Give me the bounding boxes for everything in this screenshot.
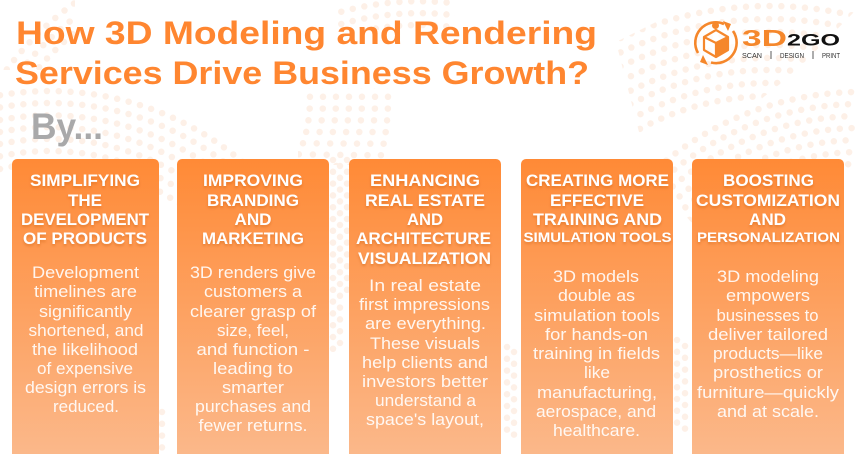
heading: ENHANCING bbox=[370, 171, 480, 190]
heading: SIMPLIFYING bbox=[30, 171, 140, 190]
body text: prosthetics or bbox=[713, 363, 823, 382]
heading: DEVELOPMENT bbox=[21, 210, 150, 229]
heading: THE bbox=[68, 191, 102, 210]
body text: significantly bbox=[39, 302, 133, 321]
body text: 3D models bbox=[553, 267, 639, 286]
logo tagline: SCAN bbox=[742, 53, 762, 60]
heading bbox=[356, 171, 491, 268]
logo tagline bbox=[742, 51, 841, 60]
heading: ARCHITECTURE bbox=[356, 229, 491, 248]
heading: CREATING MORE bbox=[526, 171, 669, 190]
body text: furniture—quickly bbox=[697, 383, 840, 402]
body text: empowers bbox=[726, 286, 810, 305]
body text: smarter bbox=[222, 378, 284, 397]
heading bbox=[696, 171, 840, 245]
heading bbox=[524, 171, 672, 245]
title: How 3D Modeling and Rendering bbox=[16, 15, 597, 51]
body text: like bbox=[584, 363, 610, 382]
heading: TRAINING AND bbox=[533, 210, 662, 229]
body text: reduced. bbox=[53, 397, 119, 416]
title: Services Drive Business Growth? bbox=[15, 55, 589, 91]
body text: deliver tailored bbox=[708, 325, 828, 344]
body text: manufacturing, bbox=[537, 383, 657, 402]
heading: OF PRODUCTS bbox=[23, 229, 147, 248]
body text: space's layout, bbox=[366, 410, 484, 429]
body text: understand a bbox=[375, 391, 477, 410]
logo: 3D2GO bbox=[695, 21, 841, 65]
body text: Development bbox=[32, 263, 139, 282]
heading: SIMULATION TOOLS bbox=[524, 229, 672, 245]
subheading: By...: By... bbox=[31, 106, 103, 147]
heading bbox=[202, 171, 304, 248]
heading: MARKETING bbox=[202, 229, 304, 248]
body text: products—like bbox=[713, 344, 823, 363]
body text: customers a bbox=[204, 282, 303, 301]
panel: simplifying the development of products bbox=[12, 159, 159, 454]
body text: 3D renders give bbox=[190, 263, 316, 282]
panel: creating more effective training and simulation tools bbox=[521, 159, 673, 454]
body text: size, feel, bbox=[217, 321, 289, 340]
body text: first impressions bbox=[359, 295, 490, 314]
heading: CUSTOMIZATION bbox=[696, 191, 840, 210]
body text: and at scale. bbox=[717, 402, 819, 421]
body text: simulation tools bbox=[534, 306, 660, 325]
body text bbox=[533, 267, 660, 440]
body text: for hands-on bbox=[545, 325, 648, 344]
panel: improving branding and marketing bbox=[177, 159, 329, 454]
body text: design errors is bbox=[25, 378, 146, 397]
heading: REAL ESTATE bbox=[365, 191, 485, 210]
body text: aerospace, and bbox=[536, 402, 656, 421]
logo wordmark: 2GO bbox=[787, 30, 840, 50]
icon: ring with arrows and cube bbox=[695, 21, 737, 65]
body text bbox=[25, 263, 146, 416]
heading: BOOSTING bbox=[723, 171, 814, 190]
logo wordmark bbox=[742, 25, 840, 51]
heading: AND bbox=[749, 210, 786, 229]
logo tagline: DESIGN bbox=[780, 53, 804, 60]
heading: BRANDING bbox=[207, 191, 299, 210]
body text: shortened, and bbox=[28, 321, 144, 340]
heading: AND bbox=[234, 210, 272, 229]
body text: and function - bbox=[196, 340, 310, 359]
heading: PERSONALIZATION bbox=[697, 229, 840, 245]
body text: investors better bbox=[362, 372, 488, 391]
body text: businesses to bbox=[716, 306, 818, 325]
body text: healthcare. bbox=[553, 421, 640, 440]
body text: fewer returns. bbox=[198, 416, 308, 435]
panel: enhancing real estate and architecture visualization bbox=[349, 159, 501, 454]
body text: 3D modeling bbox=[717, 267, 819, 286]
panel: boosting customization and personalization bbox=[692, 159, 844, 454]
body text: clearer grasp of bbox=[190, 302, 316, 321]
body text: training in fields bbox=[533, 344, 660, 363]
logo tagline: PRINT bbox=[822, 53, 841, 60]
body text: are everything. bbox=[365, 314, 486, 333]
body text: These visuals bbox=[370, 334, 480, 353]
body text bbox=[359, 276, 490, 429]
heading bbox=[21, 171, 150, 248]
body text bbox=[697, 267, 840, 421]
body text: of expensive bbox=[37, 359, 133, 378]
heading: VISUALIZATION bbox=[358, 249, 491, 268]
body text: help clients and bbox=[362, 353, 488, 372]
body text: timelines are bbox=[34, 282, 137, 301]
body text: the likelihood bbox=[32, 340, 138, 359]
body text: leading to bbox=[213, 359, 293, 378]
body text: In real estate bbox=[369, 276, 481, 295]
heading: EFFECTIVE bbox=[550, 191, 644, 210]
logo wordmark: 3D bbox=[742, 25, 787, 51]
body text: double as bbox=[558, 286, 635, 305]
body text: purchases and bbox=[195, 397, 311, 416]
heading: IMPROVING bbox=[203, 171, 303, 190]
heading: AND bbox=[407, 210, 443, 229]
body text bbox=[190, 263, 316, 435]
title bbox=[15, 15, 597, 91]
